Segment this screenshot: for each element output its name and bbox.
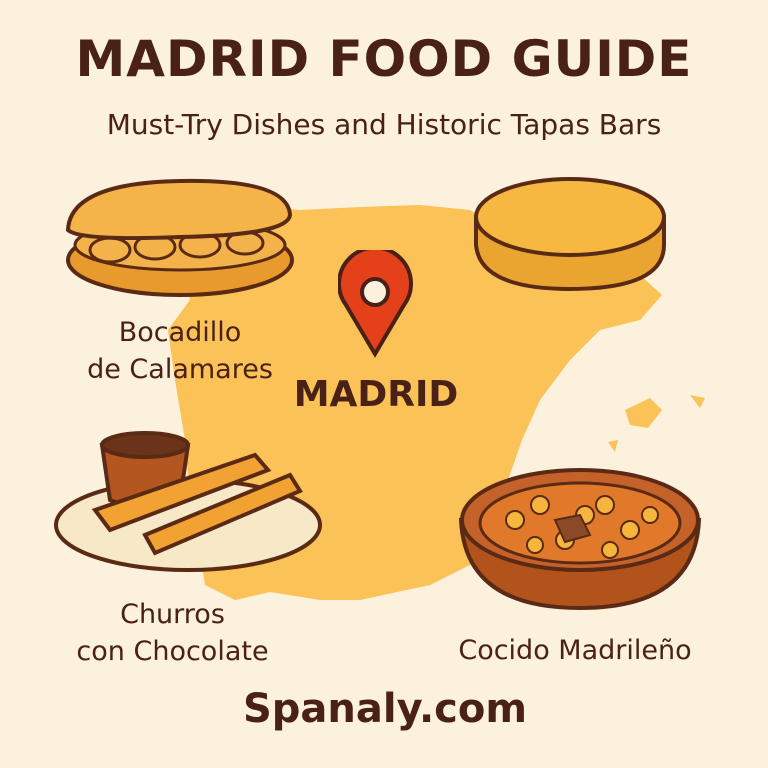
icon: cocido bowl: [458, 468, 702, 610]
label: churros: con Chocolate: [76, 636, 269, 667]
label: churros: Churros: [120, 599, 225, 630]
icon: map pin: [338, 250, 413, 358]
label: bocadillo: de Calamares: [87, 354, 273, 385]
label: bocadillo: Bocadillo: [119, 317, 241, 348]
icon: bocadillo sandwich: [66, 178, 294, 297]
label: bocadillo: [87, 317, 273, 385]
footer: website: Spanaly.com: [243, 686, 527, 732]
icon: tortilla: [474, 177, 666, 291]
title: MADRID FOOD GUIDE: [76, 30, 692, 88]
label: churros: [76, 599, 269, 667]
label: Madrid: MADRID: [294, 374, 458, 415]
icon: churros con chocolate: [54, 431, 322, 572]
subtitle: Must-Try Dishes and Historic Tapas Bars: [107, 108, 661, 141]
label: cocido: Cocido Madrileño: [458, 635, 692, 666]
